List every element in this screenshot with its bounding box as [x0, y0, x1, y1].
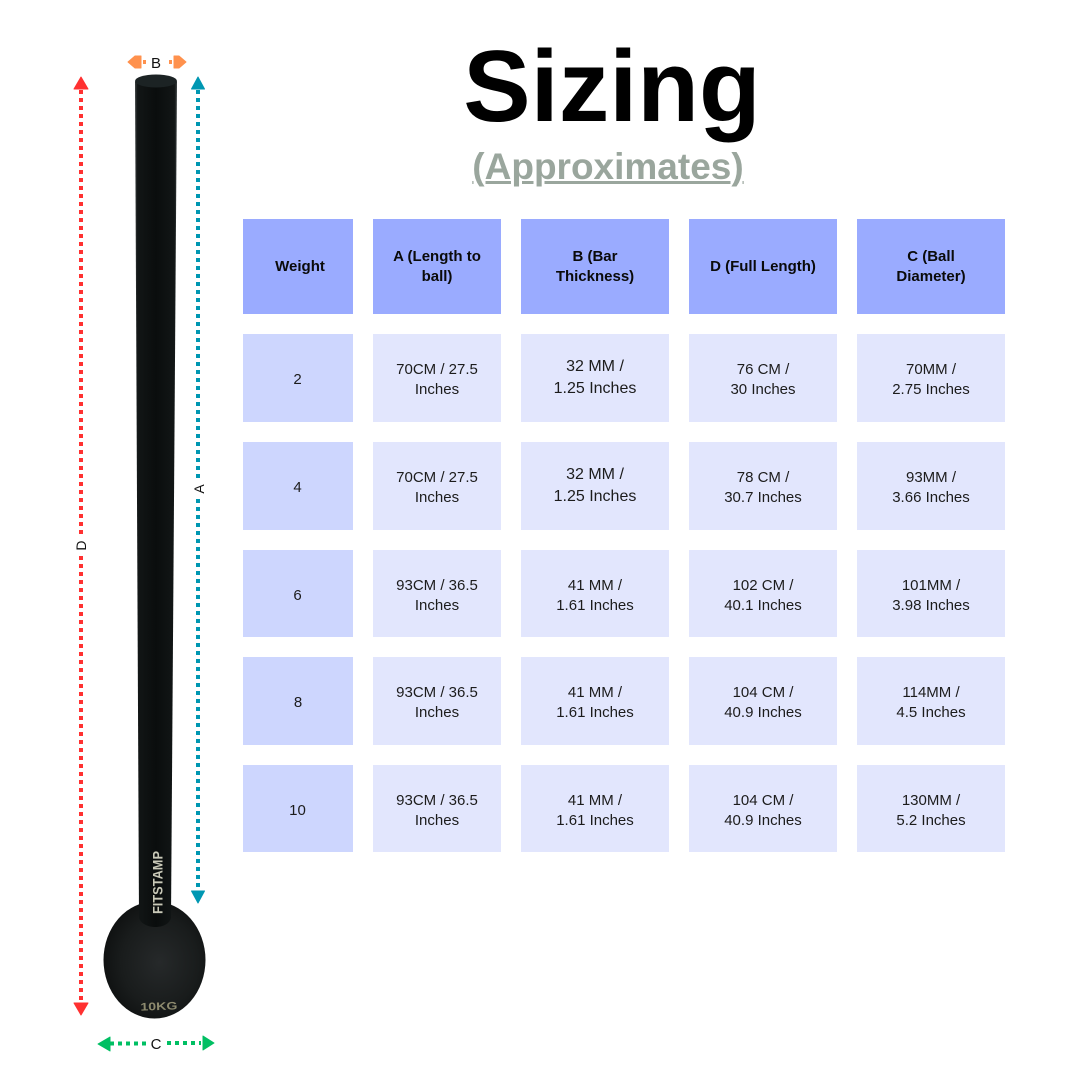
row 10kg A — [373, 765, 501, 852]
row 2kg D — [689, 334, 837, 422]
row 4kg C — [857, 442, 1005, 530]
arrow: B bar thickness — [128, 55, 186, 72]
row 6kg C — [857, 550, 1005, 637]
arrow: D full length: D — [73, 540, 89, 551]
arrow: A length to ball — [191, 77, 207, 903]
icon: mace bar: FITSTAMP — [150, 851, 166, 914]
row 6kg D — [689, 550, 837, 637]
row 6kg D: 102 CM / — [733, 576, 793, 594]
row 10kg A: Inches — [415, 812, 459, 828]
arrow: A length to ball: A — [191, 484, 207, 494]
header: C: C (Ball — [907, 248, 955, 264]
row 10kg B: 1.61 Inches — [556, 812, 634, 828]
row 4kg D: 78 CM / — [737, 469, 789, 486]
row 4kg C: 3.66 Inches — [892, 489, 970, 506]
row 2kg A — [373, 334, 501, 422]
row 6kg D: 40.1 Inches — [724, 596, 802, 614]
row 6kg B — [521, 550, 669, 637]
row 6kg weight — [243, 550, 353, 637]
header: D — [689, 219, 837, 314]
row 10kg D: 40.9 Inches — [724, 812, 802, 828]
header: weight — [243, 219, 353, 314]
diagram: mace with dimensions — [73, 55, 214, 1053]
row 8kg B: 41 MM / — [568, 684, 622, 701]
row 6kg C: 101MM / — [902, 576, 960, 594]
row 8kg C — [857, 657, 1005, 745]
row 8kg A: Inches — [415, 704, 459, 721]
row 2kg B: 1.25 Inches — [554, 380, 636, 397]
row 6kg A: 93CM / 36.5 — [396, 576, 478, 594]
row 8kg C: 114MM / — [902, 684, 960, 701]
row 10kg C: 5.2 Inches — [896, 812, 966, 828]
row 4kg weight — [243, 442, 353, 530]
row 2kg C — [857, 334, 1005, 422]
icon: mace ball: 10KG — [140, 1000, 178, 1014]
row 6kg C: 3.98 Inches — [892, 596, 970, 614]
row 4kg D: 30.7 Inches — [724, 489, 802, 506]
row 10kg D — [689, 765, 837, 852]
row 10kg B: 41 MM / — [568, 792, 622, 808]
arrow: C ball diameter — [98, 1036, 214, 1053]
header: A: ball) — [422, 268, 452, 284]
row 4kg C: 93MM / — [906, 469, 956, 486]
row 2kg C: 70MM / — [906, 361, 956, 378]
row 2kg C: 2.75 Inches — [892, 381, 970, 398]
row 2kg A: Inches — [415, 381, 459, 398]
header: B — [521, 219, 669, 314]
row 4kg A: 70CM / 27.5 — [396, 469, 478, 486]
row 8kg A — [373, 657, 501, 745]
row 8kg A: 93CM / 36.5 — [396, 684, 478, 701]
row 8kg D: 104 CM / — [733, 684, 793, 701]
row 4kg A: Inches — [415, 489, 459, 506]
row 6kg B: 1.61 Inches — [556, 596, 634, 614]
row 4kg B: 32 MM / — [566, 466, 624, 483]
header: A — [373, 219, 501, 314]
row 10kg weight — [243, 765, 353, 852]
row 4kg A — [373, 442, 501, 530]
row 10kg weight: 10 — [289, 802, 306, 818]
row 8kg D — [689, 657, 837, 745]
row 8kg C: 4.5 Inches — [896, 704, 966, 721]
row 6kg weight: 6 — [293, 586, 302, 604]
row 2kg D: 76 CM / — [737, 361, 789, 378]
row 6kg A — [373, 550, 501, 637]
title: Sizing — [463, 31, 761, 143]
row 2kg A: 70CM / 27.5 — [396, 361, 478, 378]
row 10kg C: 130MM / — [902, 792, 960, 808]
arrow: C ball diameter: C — [151, 1036, 162, 1053]
row 2kg B — [521, 334, 669, 422]
row 6kg B: 41 MM / — [568, 576, 622, 594]
header: D: D (Full Length) — [710, 258, 816, 274]
header: A: A (Length to — [393, 248, 481, 264]
header: C — [857, 219, 1005, 314]
header: weight: Weight — [275, 258, 325, 274]
row 2kg weight: 2 — [293, 371, 302, 388]
row 6kg A: Inches — [415, 596, 459, 614]
row 4kg B: 1.25 Inches — [554, 488, 636, 505]
row 10kg C — [857, 765, 1005, 852]
row 2kg weight — [243, 334, 353, 422]
row 8kg B: 1.61 Inches — [556, 704, 634, 721]
row 10kg D: 104 CM / — [733, 792, 793, 808]
icon: mace ball — [104, 902, 206, 1018]
row 4kg weight: 4 — [293, 479, 302, 496]
row 4kg B — [521, 442, 669, 530]
row 2kg B: 32 MM / — [566, 358, 624, 375]
arrow: B bar thickness: B — [151, 55, 161, 72]
subtitle: (Approximates) — [472, 146, 744, 187]
row 2kg D: 30 Inches — [730, 381, 796, 398]
icon: mace bar — [135, 74, 177, 927]
row 8kg weight: 8 — [294, 694, 302, 711]
row 8kg weight — [243, 657, 353, 745]
header: B: Thickness) — [556, 268, 634, 284]
row 10kg B — [521, 765, 669, 852]
row 8kg D: 40.9 Inches — [724, 704, 802, 721]
header: C: Diameter) — [896, 268, 966, 284]
row 4kg D — [689, 442, 837, 530]
row 10kg A: 93CM / 36.5 — [396, 792, 478, 808]
row 8kg B — [521, 657, 669, 745]
arrow: D full length — [73, 77, 89, 1015]
header: B: B (Bar — [572, 248, 618, 264]
